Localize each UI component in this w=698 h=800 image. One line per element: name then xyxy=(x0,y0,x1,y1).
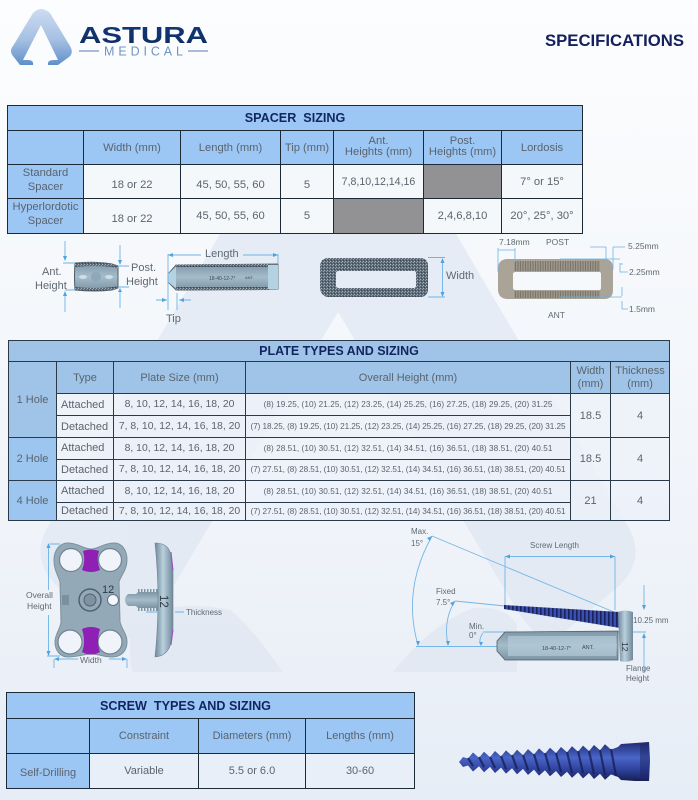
screw title row xyxy=(7,693,414,788)
wordmark ASTURA: ASTURA xyxy=(79,22,208,48)
angle labels: Max. xyxy=(411,527,428,536)
spacer engraving: 18-40-12-7° xyxy=(542,646,571,652)
spacer highlight xyxy=(508,636,616,656)
spacer title row: SPACER SIZING xyxy=(245,111,345,125)
spacer engraving: ANT. xyxy=(582,645,594,651)
thread shading xyxy=(468,749,616,776)
spacer header row: Lordosis xyxy=(521,142,563,154)
threaded shaft and head xyxy=(459,742,650,781)
top view dimension lines xyxy=(498,247,628,309)
plate labels: Overall xyxy=(26,590,53,600)
spacer side body xyxy=(168,264,278,290)
screw angle diagram xyxy=(411,527,669,683)
thickness label: Thickness xyxy=(186,608,222,617)
center screw xyxy=(79,589,101,611)
table: spacer sizing xyxy=(7,105,583,234)
4 hole attached row: 21 xyxy=(584,494,597,506)
4 hole attached row: Attached xyxy=(61,485,104,497)
angle labels: 7.5° xyxy=(436,598,450,607)
1 hole detached row xyxy=(61,420,566,432)
4 hole attached row: 4 Hole xyxy=(17,494,48,506)
hyperlordotic spacer row: Hyperlordotic xyxy=(13,201,78,213)
spacer top view diagram xyxy=(498,237,660,320)
1 hole attached row: 4 xyxy=(637,410,643,422)
hyperlordotic spacer row: 45, 50, 55, 60 xyxy=(196,210,265,222)
purple screws xyxy=(82,550,100,654)
angle lines and arcs xyxy=(412,536,646,672)
length label: Length xyxy=(205,248,239,260)
porous ring xyxy=(320,258,428,297)
plate header row: (mm) xyxy=(578,378,603,390)
watermark legs xyxy=(40,108,636,640)
2 hole attached row: (8) 28.51, (10) 30.51, (12) 32.51, (14) 34.51, (16) 36.51, (18) 38.51, (20) 40.51 xyxy=(264,444,552,453)
screw header row: Lengths (mm) xyxy=(326,730,394,742)
curved plate profile xyxy=(155,543,173,657)
spacer header row: Post. xyxy=(450,135,475,147)
2 hole attached row: 4 xyxy=(637,453,643,465)
plate header row: Width xyxy=(576,364,605,376)
angle labels: Fixed xyxy=(436,587,456,596)
spacer header row: Heights (mm) xyxy=(345,146,412,158)
4 hole detached row xyxy=(61,505,566,517)
angle labels: Screw Length xyxy=(530,541,579,550)
dimension arrowheads xyxy=(63,256,122,296)
blue screw xyxy=(504,605,620,628)
watermark left foot xyxy=(130,606,283,672)
2 hole detached row xyxy=(61,464,566,476)
hyperlordotic spacer row: 2,4,6,8,10 xyxy=(438,210,487,222)
angle labels: Flange xyxy=(626,664,651,673)
spacer side ant mark: ANT. xyxy=(245,275,254,280)
thickness dimension xyxy=(146,611,184,613)
logo mark xyxy=(11,9,72,65)
spacer header row: Length (mm) xyxy=(199,142,262,154)
width arrowheads xyxy=(440,258,444,297)
hyperlordotic spacer row: 18 or 22 xyxy=(111,213,153,225)
plate header row: (mm) xyxy=(627,378,653,390)
plate labels: Width xyxy=(80,655,102,665)
table: plate types and sizing xyxy=(8,340,670,521)
1 hole attached row: 8, 10, 12, 14, 16, 18, 20 xyxy=(125,399,234,410)
spacer header row: Width (mm) xyxy=(103,142,161,154)
1 hole attached row: (8) 19.25, (10) 21.25, (12) 23.25, (14) 25.25, (16) 27.25, (18) 29.25, (20) 31.25 xyxy=(264,400,552,409)
plate dimension lines xyxy=(47,544,127,668)
dimension labels: 2.25mm xyxy=(629,267,660,277)
spacer side flange end xyxy=(268,265,278,289)
plate header row: Type xyxy=(73,372,97,384)
plate header row: Thickness xyxy=(615,364,665,376)
wordmark rules xyxy=(79,50,208,52)
plate title row: 1 Hole xyxy=(17,394,48,406)
large blue screw xyxy=(459,742,650,781)
wordmark MEDICAL: MEDICAL xyxy=(104,44,183,58)
ant height label: Ant. xyxy=(42,266,62,278)
width label: Width xyxy=(446,270,474,282)
spacer header row xyxy=(8,130,583,164)
spacer front body xyxy=(74,262,118,291)
4 hole attached row: (8) 28.51, (10) 30.51, (12) 32.51, (14) 34.51, (16) 36.51, (18) 38.51, (20) 40.51 xyxy=(264,487,552,496)
page heading: SPECIFICATIONS xyxy=(545,32,684,50)
standard spacer row xyxy=(8,165,564,198)
porous edges xyxy=(75,262,118,291)
tan body xyxy=(498,259,613,299)
4 hole detached row: 7, 8, 10, 12, 14, 16, 18, 20 xyxy=(119,506,240,517)
post height label: Post. xyxy=(131,262,156,274)
plate body xyxy=(54,543,127,657)
protruding screw xyxy=(125,592,158,608)
watermark right foot xyxy=(393,608,517,672)
dimension labels: POST xyxy=(546,237,569,247)
size marking: 12 xyxy=(157,595,169,608)
spacer side engraving: 18-40-12-7° xyxy=(209,276,235,282)
plate header row xyxy=(9,362,669,437)
angle labels: Min. xyxy=(469,622,484,631)
2 hole detached row: (7) 27.51, (8) 28.51, (10) 30.51, (12) 32.51, (14) 34.51, (16) 36.51, (18) 38.51, (20) 40.51 xyxy=(251,465,565,474)
1 hole attached row xyxy=(61,398,643,422)
ant height label: Height xyxy=(35,280,67,292)
standard spacer row: 18 or 22 xyxy=(111,178,153,190)
spacer title row xyxy=(8,106,582,233)
purple edge xyxy=(171,552,173,645)
standard spacer row: Spacer xyxy=(28,180,63,192)
hyperlordotic spacer row: Spacer xyxy=(28,215,63,227)
spacer header row: Tip (mm) xyxy=(285,142,329,154)
4 hole detached row: Detached xyxy=(61,505,108,517)
post height label: Height xyxy=(126,276,158,288)
screw header row: Diameters (mm) xyxy=(213,730,291,742)
screw header row xyxy=(6,718,415,754)
angle arrowheads xyxy=(416,536,646,646)
background watermark logo xyxy=(40,108,636,672)
standard spacer row: 7,8,10,12,14,16 xyxy=(342,176,415,188)
size marking: 12 xyxy=(102,584,114,596)
dimension labels: ANT xyxy=(548,310,565,320)
side features xyxy=(108,594,118,606)
standard spacer row: 5 xyxy=(304,178,310,190)
1 hole detached row: 7, 8, 10, 12, 14, 16, 18, 20 xyxy=(119,421,240,432)
self-drilling row xyxy=(7,754,374,788)
screw head shading xyxy=(640,742,650,781)
2 hole detached row: Detached xyxy=(61,464,108,476)
plate holes xyxy=(58,548,122,654)
screw title row: SCREW TYPES AND SIZING xyxy=(100,698,271,712)
1 hole attached row: Attached xyxy=(61,398,104,410)
angle labels: 0° xyxy=(469,631,477,640)
hyperlordotic spacer row: 20°, 25°, 30° xyxy=(510,210,574,222)
spacer side view diagram xyxy=(156,248,278,325)
2 hole attached row: 8, 10, 12, 14, 16, 18, 20 xyxy=(125,443,234,454)
length arrowheads xyxy=(162,253,278,302)
spacer front view diagram xyxy=(35,241,158,312)
plate title row: PLATE TYPES AND SIZING xyxy=(259,344,419,358)
small slot xyxy=(62,595,69,605)
4 hole attached row: 8, 10, 12, 14, 16, 18, 20 xyxy=(125,486,234,497)
self-drilling row: 30-60 xyxy=(346,765,374,777)
4 hole detached row: (7) 27.51, (8) 28.51, (10) 30.51, (12) 32.51, (14) 34.51, (16) 36.51, (18) 38.51, (20) 40.51 xyxy=(251,507,565,516)
ridges xyxy=(514,261,600,298)
1 hole detached row: Detached xyxy=(61,420,108,432)
table: screw types and sizing xyxy=(6,692,415,789)
porous edges xyxy=(176,264,270,290)
logo xyxy=(11,9,208,65)
2 hole detached row: 7, 8, 10, 12, 14, 16, 18, 20 xyxy=(119,464,240,475)
spacer header row: Heights (mm) xyxy=(429,146,496,158)
dimension labels: 7.18mm xyxy=(499,237,530,247)
screw header row: Constraint xyxy=(119,730,169,742)
ant height dimension xyxy=(63,241,129,312)
plate dimension arrowheads xyxy=(46,543,127,661)
spacer bottom view diagram xyxy=(320,258,474,297)
spacer side tip xyxy=(168,267,176,288)
plate header row: Plate Size (mm) xyxy=(140,372,219,384)
spacer header row: Ant. xyxy=(369,135,388,147)
self-drilling row: Variable xyxy=(124,765,164,777)
plate front view diagram xyxy=(26,543,127,668)
width dimension xyxy=(428,258,445,297)
standard spacer row: 7° or 15° xyxy=(520,176,564,188)
self-drilling row: 5.5 or 6.0 xyxy=(229,765,275,777)
standard spacer row: 45, 50, 55, 60 xyxy=(196,178,265,190)
spacer side xyxy=(497,631,618,660)
plate title row xyxy=(9,341,669,520)
spacer front holes xyxy=(79,272,113,282)
angle labels: 10.25 mm xyxy=(633,616,669,625)
hyperlordotic spacer row: 5 xyxy=(304,210,310,222)
1 hole detached row: (7) 18.25, (8) 19.25, (10) 21.25, (12) 23.25, (14) 25.25, (16) 27.25, (18) 29.25, (20) 31.25 xyxy=(251,422,565,431)
2 hole attached row: Attached xyxy=(61,442,104,454)
flange marking: 12 xyxy=(620,642,630,652)
dimension labels: 5.25mm xyxy=(628,241,659,251)
plate side view diagram xyxy=(125,543,222,657)
angle labels: 15° xyxy=(411,539,423,548)
1 hole attached row: 18.5 xyxy=(580,410,601,422)
hyperlordotic spacer row xyxy=(8,199,574,233)
plate header row: Overall Height (mm) xyxy=(359,372,457,384)
self-drilling row: Self-Drilling xyxy=(20,767,76,779)
dimension labels: 1.5mm xyxy=(629,304,655,314)
2 hole attached row xyxy=(9,438,643,480)
length dimension xyxy=(156,254,278,310)
plate labels: Height xyxy=(27,601,52,611)
4 hole attached row xyxy=(9,481,643,520)
2 hole attached row: 18.5 xyxy=(580,453,601,465)
angle labels: Height xyxy=(626,674,650,683)
flange xyxy=(618,610,633,662)
4 hole attached row: 4 xyxy=(637,494,643,506)
tip label: Tip xyxy=(166,313,181,325)
standard spacer row: Standard xyxy=(23,166,68,178)
2 hole attached row: 2 Hole xyxy=(17,453,48,465)
screw threads xyxy=(138,590,158,610)
